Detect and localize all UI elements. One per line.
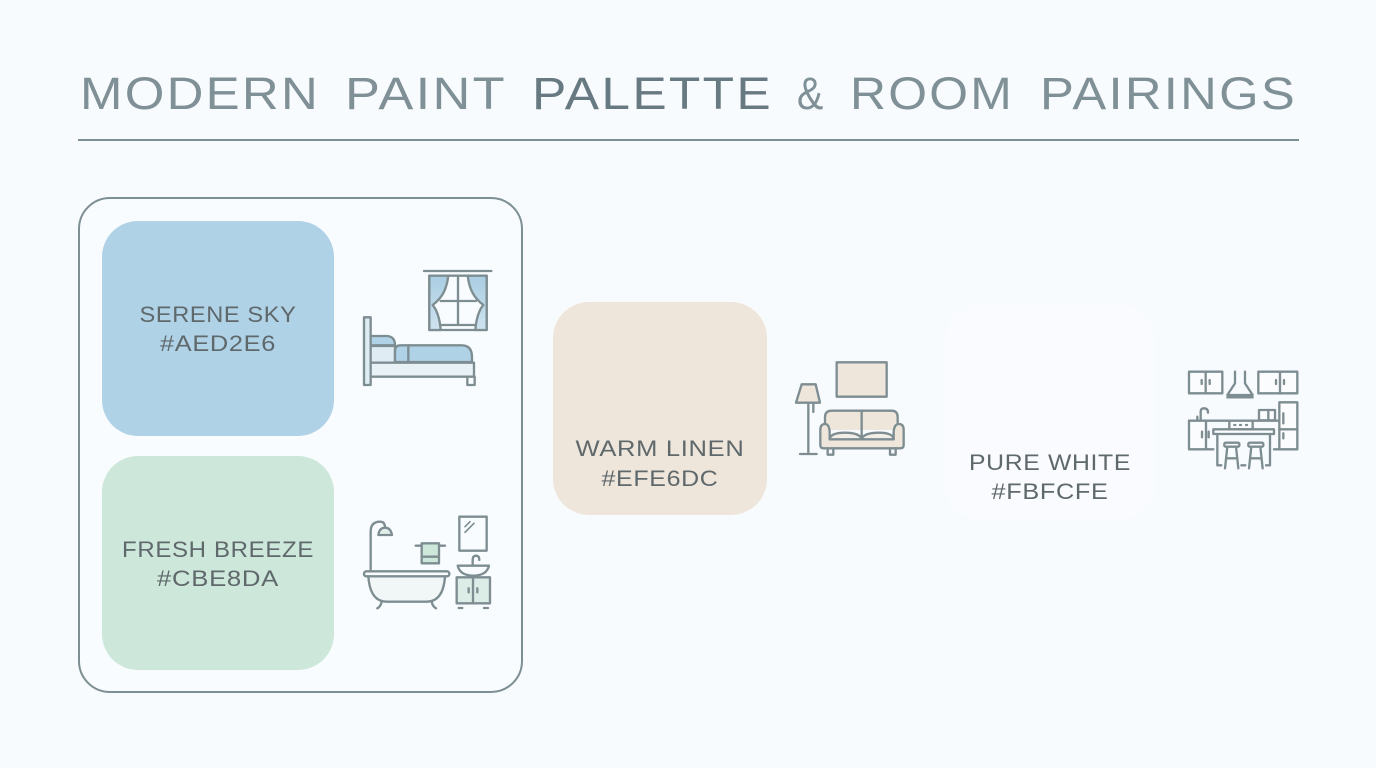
panel: grouped cool colours	[79, 198, 522, 692]
swatch: Pure White: PURE WHITE	[969, 450, 1131, 475]
swatch: Serene Sky	[102, 221, 334, 436]
icon: bathroom	[364, 517, 490, 608]
swatch: Pure White	[945, 305, 1155, 520]
swatch: Warm Linen: #EFE6DC	[602, 466, 718, 491]
title: PAIRINGS	[1040, 68, 1297, 119]
icon: bedroom	[364, 271, 491, 385]
swatch: Fresh Breeze: #CBE8DA	[157, 566, 279, 591]
swatch: Pure White: #FBFCFE	[992, 479, 1108, 504]
icon: kitchen	[1189, 372, 1297, 468]
title: &	[797, 68, 825, 119]
title: MODERN	[80, 68, 320, 119]
title: PAINT	[345, 68, 507, 119]
swatch: Serene Sky: #AED2E6	[160, 331, 276, 356]
swatch: Fresh Breeze	[102, 456, 334, 670]
title	[80, 68, 1297, 119]
icon: living room	[796, 362, 904, 455]
title: PALETTE	[532, 68, 773, 119]
title: ROOM	[850, 68, 1014, 119]
swatch: Serene Sky: SERENE SKY	[140, 302, 296, 327]
swatch: Warm Linen: WARM LINEN	[576, 436, 744, 461]
swatch: Fresh Breeze: FRESH BREEZE	[122, 537, 314, 562]
swatch: Warm Linen	[553, 302, 767, 515]
